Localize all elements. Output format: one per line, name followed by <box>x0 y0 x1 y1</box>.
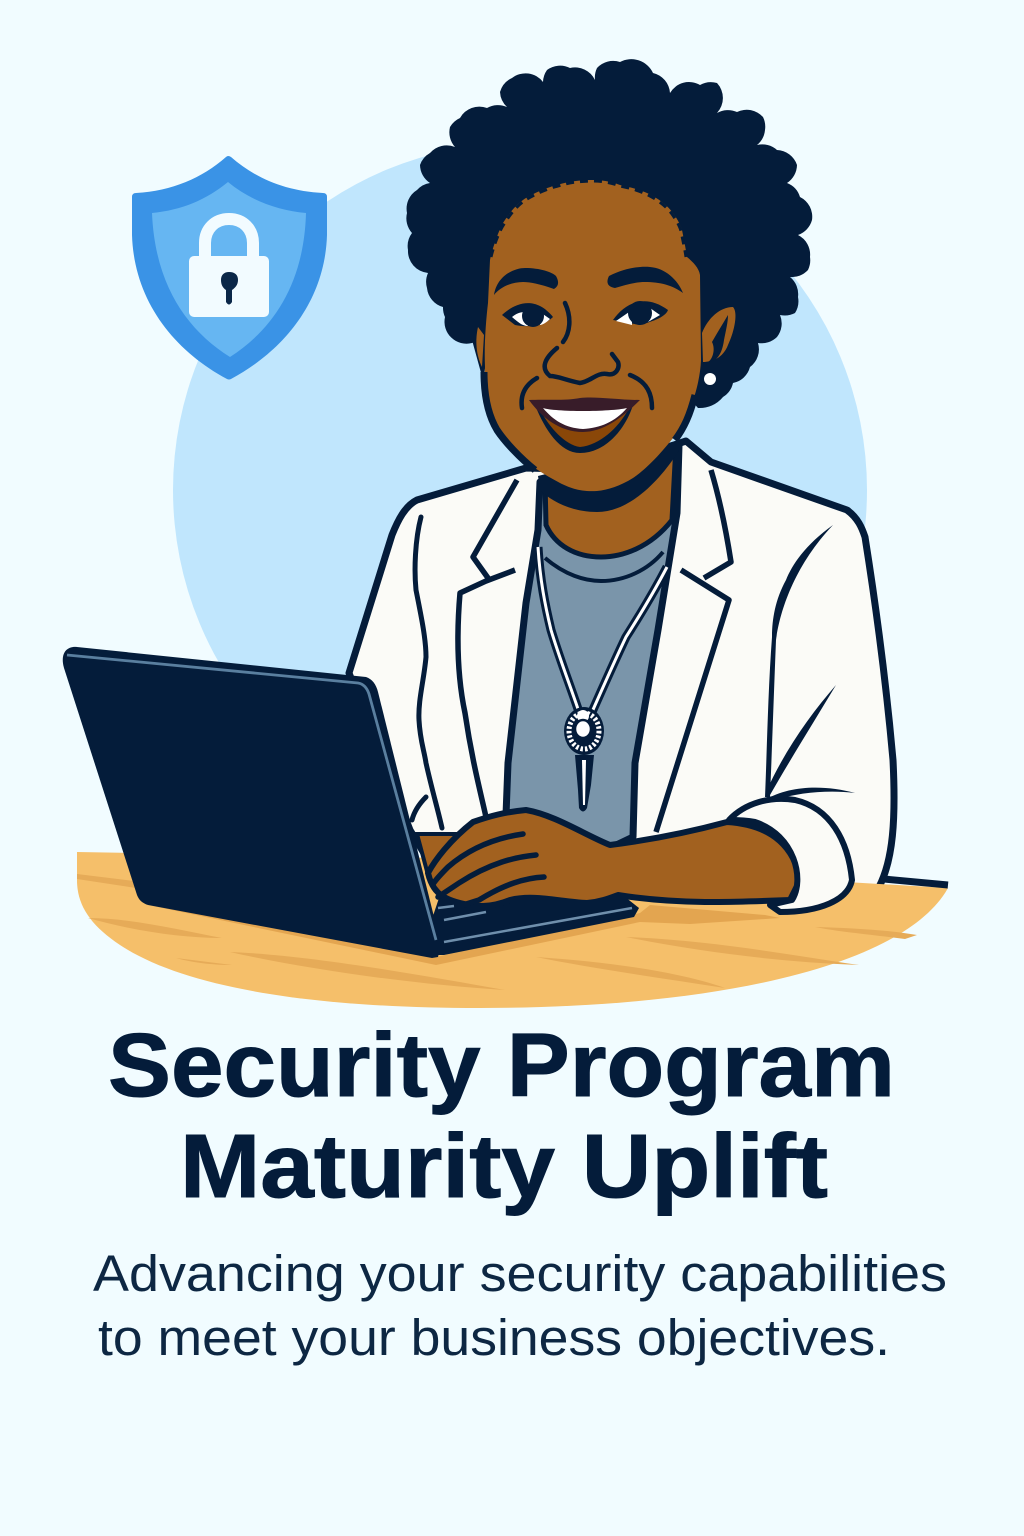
necklace <box>538 547 667 712</box>
neck shadow <box>538 440 680 512</box>
laptop <box>63 647 639 958</box>
right ear <box>702 307 735 362</box>
nose <box>522 303 652 408</box>
rolled cuff <box>729 799 852 912</box>
smile <box>529 397 640 453</box>
face <box>485 180 701 491</box>
grey t-shirt <box>506 445 679 848</box>
right sleeve folds <box>765 525 833 797</box>
left sleeve fold <box>412 517 442 828</box>
arm and hand <box>428 810 800 906</box>
table <box>77 852 948 1008</box>
left eye <box>502 303 553 327</box>
hair <box>406 59 812 408</box>
pendant <box>564 707 604 812</box>
left lapel lines <box>458 480 517 817</box>
subtitle: to meet your business objectives. <box>98 1309 890 1366</box>
title: Maturity Uplift <box>180 1117 828 1217</box>
wood grain <box>77 874 917 990</box>
blazer and shirt <box>349 441 894 905</box>
laptop base <box>420 893 639 955</box>
left ear <box>472 327 492 380</box>
subtitle <box>93 1245 947 1366</box>
laptop and arm shadows <box>148 905 780 965</box>
eyebrows <box>494 267 683 295</box>
cuff fold <box>765 788 855 800</box>
blazer body <box>349 441 894 905</box>
icon: security shield with padlock <box>132 156 327 380</box>
shirt collar <box>545 552 663 581</box>
jaw outline <box>484 372 695 470</box>
serrated hairline <box>491 181 686 257</box>
far hand <box>417 834 462 875</box>
laptop lid <box>63 647 441 958</box>
subtitle: Advancing your security capabilities <box>93 1245 947 1302</box>
right lapel lines <box>656 470 731 832</box>
background circle <box>173 143 867 837</box>
title <box>108 1016 895 1217</box>
title: Security Program <box>108 1016 895 1116</box>
right eye <box>613 301 668 325</box>
neck <box>545 445 676 557</box>
finger lines <box>433 834 544 906</box>
earring <box>704 373 716 385</box>
